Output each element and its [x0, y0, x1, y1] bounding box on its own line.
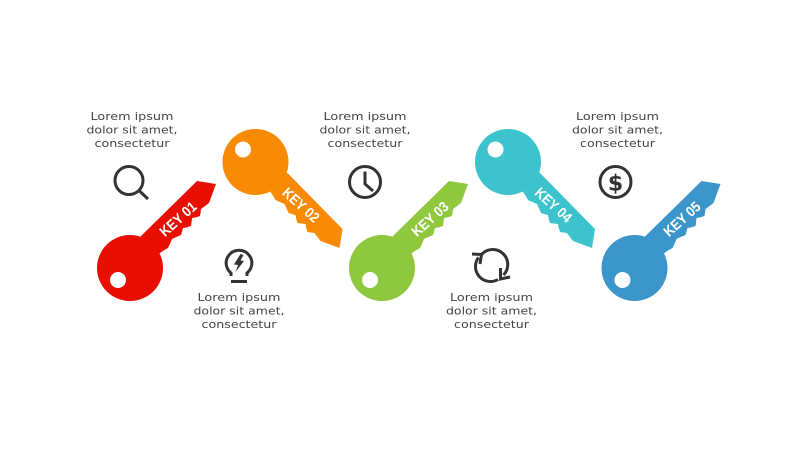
text block 3: dolor sit amet,	[320, 124, 410, 136]
text block 5: consectetur	[580, 137, 656, 150]
key 05: KEY 05	[661, 199, 704, 240]
text block 3: Lorem ipsum	[324, 110, 406, 123]
key 02: KEY 02	[279, 185, 322, 226]
text block 5	[572, 110, 663, 150]
key 03	[349, 181, 468, 301]
key 03: KEY 03	[409, 199, 452, 240]
text block 2: consectetur	[202, 318, 277, 331]
text block 3: consectetur	[328, 137, 403, 150]
icon: light bulb	[226, 250, 252, 283]
icon: dollar	[600, 166, 631, 198]
key 01: KEY 01	[157, 199, 200, 240]
text block 4: dolor sit amet,	[446, 304, 537, 318]
key 04: KEY 04	[531, 185, 575, 226]
text block 1: dolor sit amet,	[86, 124, 178, 136]
key 04	[475, 129, 595, 248]
text block 5: dolor sit amet,	[572, 124, 663, 136]
text block 4: Lorem ipsum	[450, 291, 533, 304]
text block 4	[446, 291, 537, 331]
key 05	[602, 181, 720, 301]
text block 2: dolor sit amet,	[194, 304, 284, 318]
text block 2	[194, 291, 284, 331]
icon: refresh arrows	[472, 249, 510, 282]
key 01	[97, 181, 216, 301]
text block 4: consectetur	[454, 318, 530, 331]
key 02	[222, 129, 342, 248]
text block 5: Lorem ipsum	[576, 110, 659, 123]
icon: magnifier	[115, 166, 148, 199]
icon: clock	[350, 166, 380, 198]
text block 3	[320, 110, 410, 150]
text block 1: Lorem ipsum	[90, 110, 174, 123]
text block 2: Lorem ipsum	[198, 291, 280, 304]
text block 1: consectetur	[94, 137, 170, 150]
icon: dollar: $	[608, 172, 623, 196]
text block 1	[86, 110, 178, 150]
